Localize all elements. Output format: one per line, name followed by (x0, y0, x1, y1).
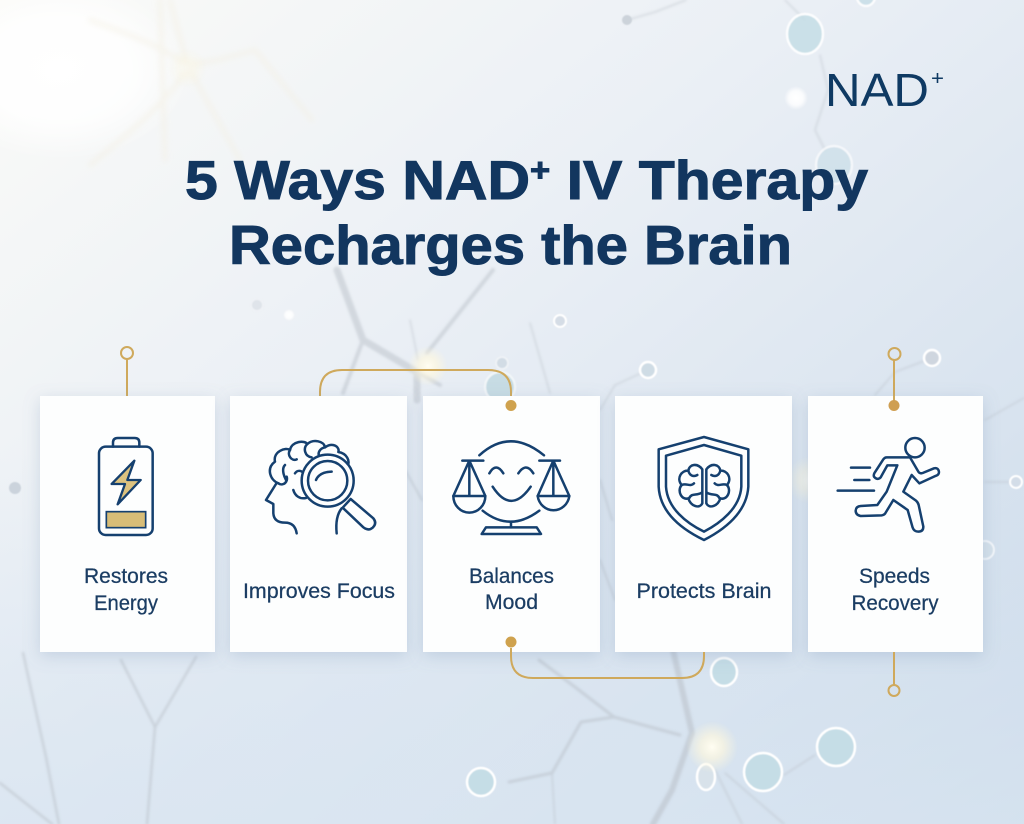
title (185, 150, 869, 276)
connector: gold link from card 3 to card 4 (506, 636, 704, 678)
panel: card 3 (423, 396, 600, 652)
connector dot on card 3 top (506, 400, 516, 411)
label: Improves Focus: Improves Focus (243, 580, 395, 603)
icon: smiling face on balance scales (453, 441, 569, 534)
panel: card 5 (808, 396, 983, 652)
label: Speeds Recovery: Recovery (852, 592, 939, 615)
label: Balances Mood: Mood (485, 591, 538, 614)
title line 1: IV Therapy (550, 150, 869, 211)
logo plus sign: + (931, 68, 944, 90)
connector: gold link from card 2 to card 3 (320, 370, 511, 405)
label: Protects Brain: Protects Brain (636, 580, 772, 603)
label: Restores Energy (84, 565, 168, 615)
glows (167, 48, 834, 773)
icon: head with brain and magnifier (266, 441, 375, 533)
label: Balances Mood (469, 565, 554, 614)
title line 1: 5 Ways NAD (185, 150, 504, 211)
connector: bottom gold pin under card 5 (888, 652, 900, 696)
icon: running figure with speed lines (838, 438, 939, 532)
label: Speeds Recovery: Speeds (859, 565, 930, 588)
panel: card 2 (230, 396, 407, 652)
connector ring: top pin on card 5 (888, 348, 900, 360)
label: Balances Mood: Balances (469, 565, 554, 588)
title line 2: Recharges the Brain (229, 215, 792, 276)
connector dot on card 5 top (888, 396, 900, 411)
icon: shield with brain (659, 437, 748, 540)
label: Restores Energy: Restores (84, 565, 168, 588)
connector: top gold pin over card 5 (893, 360, 895, 397)
label: Speeds Recovery (852, 565, 939, 615)
logo: NAD+: NAD (825, 64, 929, 116)
connector: top gold pin over card 1 (121, 347, 133, 397)
panel: card 1 (40, 396, 215, 652)
label: Restores Energy: Energy (94, 592, 158, 615)
icon: battery (99, 438, 153, 535)
title line 1: + (530, 152, 550, 188)
panel: card 4 (615, 396, 792, 652)
